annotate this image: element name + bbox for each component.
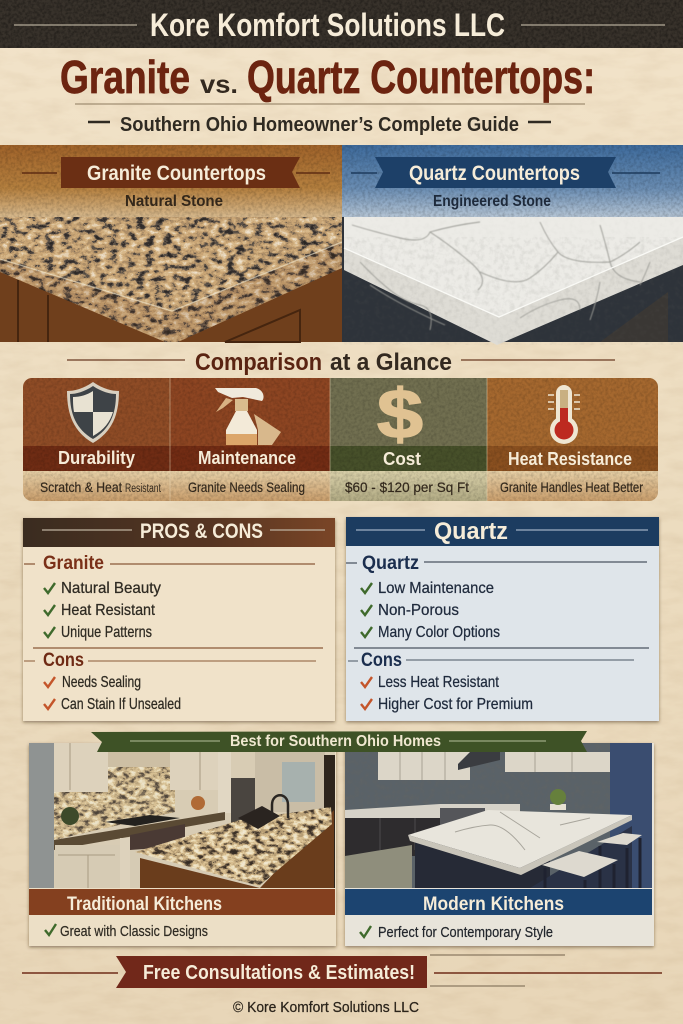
- banner: best for southern ohio homes: Best for Southern Ohio Homes: [230, 733, 441, 750]
- granite pros header: [23, 518, 335, 547]
- footer copyright: © Kore Komfort Solutions LLC: [233, 999, 419, 1016]
- granite pros list: Natural Beauty: [61, 580, 161, 597]
- granite subheading: Natural Stone: [125, 193, 223, 210]
- quartz slab photo: [342, 217, 683, 345]
- durability label: Durability: [58, 448, 135, 468]
- section heading: comparison at a glance: [67, 349, 615, 376]
- traditional kitchens label: Traditional Kitchens: [67, 894, 222, 915]
- modern kitchens note: Perfect for Contemporary Style: [378, 924, 553, 941]
- quartz cons list: Cons: [361, 650, 402, 671]
- icon: shield: [67, 382, 119, 443]
- comparison cards: [23, 375, 658, 501]
- icon: spray bottle: [215, 388, 281, 445]
- modern kitchens label: [345, 889, 652, 915]
- section heading: comparison at a glance: Comparison: [195, 349, 322, 376]
- heat resistance label: Heat Resistance: [508, 449, 632, 469]
- panel: quartz countertops: [342, 145, 683, 345]
- heat resistance note: Granite Handles Heat Better: [500, 479, 643, 495]
- title: Granite vs. Quartz Countertops: Granite: [60, 51, 190, 103]
- granite ribbon heading: Granite Countertops: [87, 162, 266, 185]
- panel: granite pros and cons: [23, 518, 335, 721]
- card: maintenance: [170, 378, 330, 501]
- maintenance note: Granite Needs Sealing: [188, 479, 305, 495]
- icon: thermometer: [548, 385, 580, 444]
- granite pros header: PROS & CONS: [140, 520, 263, 543]
- title: Granite vs. Quartz Countertops: [60, 51, 595, 103]
- header bar: company name: Kore Komfort Solutions LLC: [150, 7, 505, 43]
- title: Granite vs. Quartz Countertops: vs.: [200, 71, 238, 99]
- panel: modern kitchens: [345, 743, 654, 946]
- granite cons list: Can Stain If Unsealed: [61, 696, 181, 713]
- card: cost: [330, 375, 487, 501]
- panel: traditional kitchens: [29, 743, 336, 946]
- granite pros list: Heat Resistant: [61, 602, 155, 619]
- photo: modern kitchen: [345, 743, 652, 888]
- quartz pros list: Non-Porous: [378, 602, 459, 619]
- traditional kitchens label: [29, 889, 335, 915]
- cost label: Cost: [383, 449, 421, 469]
- quartz cons list: Higher Cost for Premium: [378, 696, 533, 713]
- quartz ribbon heading: Quartz Countertops: [409, 162, 580, 185]
- quartz pros list: Low Maintenance: [378, 580, 494, 597]
- granite cons list: [24, 648, 323, 713]
- quartz pros list: Many Color Options: [378, 624, 500, 641]
- header bar: company name: [0, 0, 683, 48]
- section heading: comparison at a glance: at a Glance: [330, 349, 452, 376]
- traditional kitchens note: Great with Classic Designs: [60, 923, 208, 940]
- quartz pros header: [346, 517, 659, 546]
- photo: traditional kitchen: [29, 743, 335, 890]
- banner: best for southern ohio homes: [91, 731, 587, 752]
- panel: quartz pros and cons: [346, 517, 659, 721]
- icon: dollar sign: $: [377, 375, 423, 453]
- durability note: Resistant: [125, 483, 162, 495]
- quartz pros list: Quartz: [362, 553, 419, 574]
- granite pros list: [24, 553, 315, 641]
- granite cons list: Cons: [43, 650, 84, 671]
- call to action banner: Free Consultations & Estimates!: [143, 962, 415, 984]
- title: Granite vs. Quartz Countertops: Quartz Countertops:: [247, 51, 595, 103]
- quartz cons list: Less Heat Resistant: [378, 674, 499, 691]
- granite pros list: Unique Patterns: [61, 624, 152, 641]
- quartz ribbon heading: [351, 157, 660, 188]
- subtitle: Southern Ohio Homeowner’s Complete Guide: [120, 114, 519, 136]
- modern kitchens label: Modern Kitchens: [423, 894, 564, 915]
- call to action banner: [22, 955, 662, 988]
- quartz pros list: [346, 553, 647, 641]
- granite pros list: Granite: [43, 553, 104, 574]
- quartz cons list: [348, 648, 649, 713]
- durability note: Scratch & Heat: [40, 479, 122, 495]
- card: heat resistance: [487, 378, 658, 501]
- granite cons list: Needs Sealing: [62, 674, 141, 691]
- card: durability: [23, 378, 170, 501]
- cost note: $60 - $120 per Sq Ft: [345, 479, 469, 495]
- granite slab photo: [0, 217, 342, 342]
- quartz subheading: Engineered Stone: [433, 193, 551, 210]
- panel: granite countertops: [0, 145, 342, 342]
- granite ribbon heading: [22, 157, 330, 188]
- quartz pros header: Quartz: [434, 518, 508, 545]
- maintenance label: Maintenance: [198, 448, 296, 468]
- durability note: [40, 482, 161, 492]
